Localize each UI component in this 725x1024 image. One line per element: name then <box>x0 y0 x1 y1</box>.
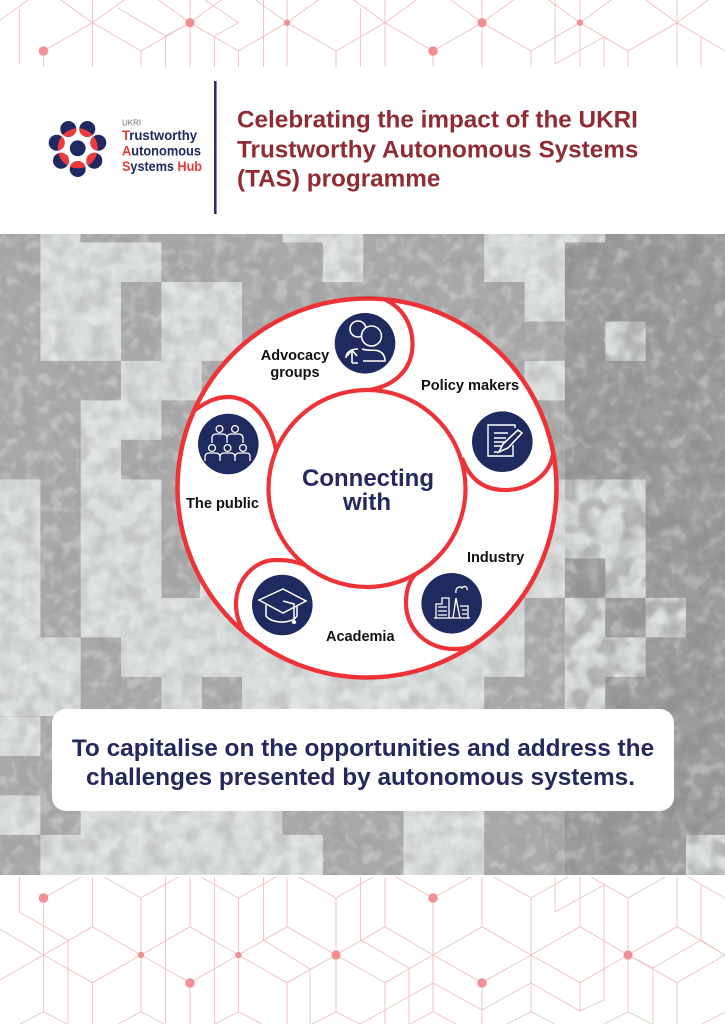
label: advocacy groups: Advocacy <box>261 348 329 364</box>
callout: mission statement <box>52 709 674 811</box>
centre label <box>302 465 434 516</box>
top geometric pattern band <box>0 0 725 67</box>
panel: connecting-with circle diagram <box>178 298 556 678</box>
icon: policy makers <box>472 411 533 472</box>
label: policy makers: Policy makers <box>421 378 519 394</box>
label: advocacy groups <box>261 348 329 381</box>
title: (TAS) programme <box>237 166 440 192</box>
logo wordmark: UKRI <box>122 118 141 128</box>
callout text <box>72 735 654 791</box>
title: Celebrating the impact of the UKRI <box>237 106 638 134</box>
header divider <box>214 81 217 214</box>
petal outlines <box>195 300 553 649</box>
icon: the public <box>198 414 259 474</box>
logo wordmark: Trustworthy <box>122 127 197 143</box>
icon: academia <box>252 575 313 635</box>
label: industry: Industry <box>467 550 524 566</box>
logo wordmark <box>122 118 202 174</box>
logo: UKRI Trustworthy Autonomous Systems Hub <box>49 118 202 177</box>
logo wordmark: Autonomous <box>122 142 201 158</box>
icon: advocacy groups <box>335 313 395 374</box>
title: Trustworthy Autonomous Systems <box>237 136 638 164</box>
bottom geometric pattern band <box>0 877 725 1024</box>
callout text: To capitalise on the opportunities and address the <box>72 735 654 762</box>
title <box>237 106 638 192</box>
label: advocacy groups: groups <box>270 365 320 381</box>
label: the public: The public <box>186 496 259 512</box>
label: academia: Academia <box>326 629 395 645</box>
background microscopy mosaic <box>0 234 725 875</box>
callout text: challenges presented by autonomous systems. <box>86 764 635 791</box>
icon: industry <box>421 573 482 634</box>
outer white disc <box>178 298 556 678</box>
logo wordmark: Systems Hub <box>122 158 202 174</box>
logo mark <box>49 121 106 177</box>
centre label: with <box>342 489 391 516</box>
inner circle <box>268 390 466 587</box>
centre label: Connecting <box>302 465 434 492</box>
